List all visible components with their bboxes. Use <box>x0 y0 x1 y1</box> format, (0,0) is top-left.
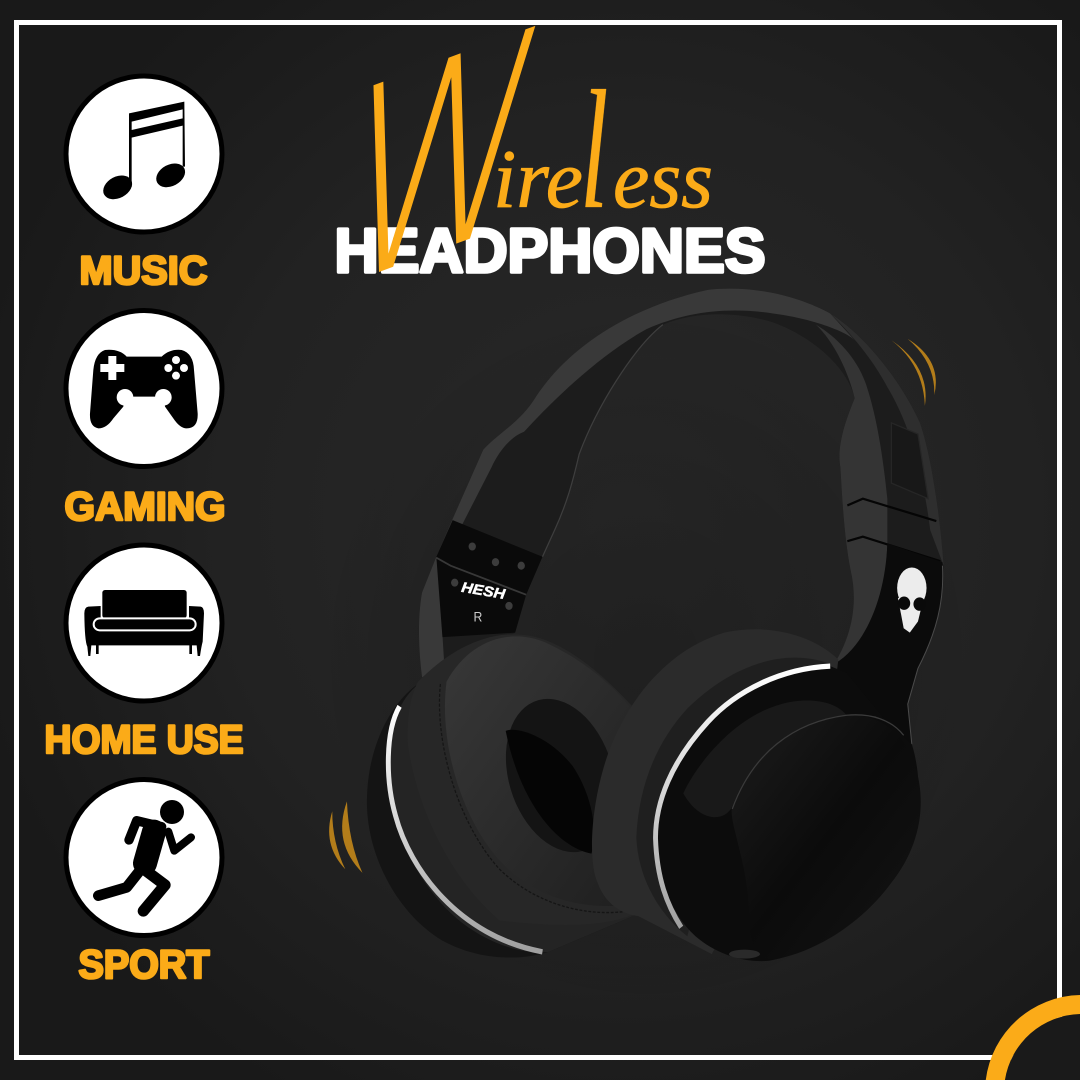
R mark: R <box>473 609 482 625</box>
left silver ring <box>388 706 542 952</box>
vibration waves left <box>329 801 362 873</box>
skull logo <box>897 567 927 633</box>
band right edge strip <box>830 313 944 566</box>
icon: sofa <box>66 545 222 701</box>
black neck panel <box>830 543 943 744</box>
HESH label: HESH <box>460 579 507 602</box>
label: sport: SPORT <box>78 943 210 987</box>
label: home use: HOME USE <box>44 718 244 762</box>
left ear hole <box>486 681 636 870</box>
right silver ring <box>656 666 830 927</box>
right ear pad <box>592 629 838 954</box>
right pad textured band <box>636 658 830 936</box>
band side button panel <box>891 423 928 499</box>
ground shadow <box>312 302 981 1017</box>
headband base <box>419 289 944 744</box>
icon: music <box>66 76 222 232</box>
disc edge highlight <box>732 715 904 809</box>
right ear cup shell <box>657 666 919 961</box>
icon: gamepad <box>66 310 222 466</box>
label: music: MUSIC <box>80 249 208 293</box>
title: wireless script <box>320 0 713 355</box>
left ear pad face <box>445 636 634 906</box>
neck edge highlight <box>908 566 943 744</box>
left ear cup shell <box>367 684 638 958</box>
right cup groove <box>683 701 847 817</box>
left ear pad <box>408 634 634 925</box>
vibration waves right <box>891 339 936 406</box>
left ear hole inner <box>506 730 594 854</box>
right cup disc <box>732 715 921 959</box>
icon: runner <box>66 780 222 936</box>
band right grey strip <box>816 325 887 704</box>
title: headphones: HEADPHONES <box>334 217 766 286</box>
jack port <box>729 950 760 959</box>
title: wireless script: l <box>580 57 608 245</box>
corner ring <box>986 995 1080 1080</box>
left pad stitching <box>439 684 624 913</box>
title: wireless script: ire <box>493 133 583 226</box>
title: wireless script: ess <box>613 133 713 226</box>
band seam <box>847 499 940 561</box>
left hinge block <box>436 520 542 637</box>
band inner edge line <box>542 325 663 557</box>
headphones illustration <box>312 289 981 1017</box>
band outer grey strip <box>419 289 855 677</box>
label: gaming: GAMING <box>64 485 226 529</box>
left cup side band <box>389 686 638 952</box>
